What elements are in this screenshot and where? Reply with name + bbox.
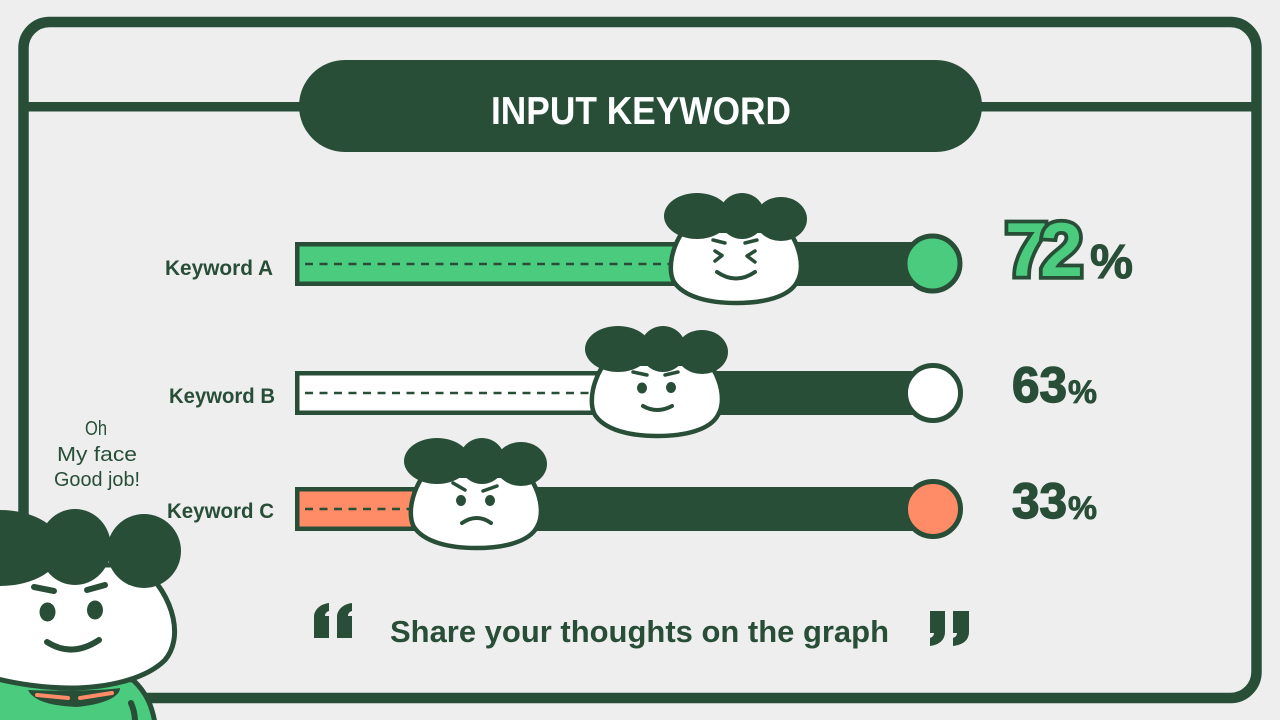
speech text (54, 418, 140, 491)
value: 63%: 63 (1012, 357, 1067, 413)
row: Keyword B (169, 326, 1097, 436)
face features (34, 585, 105, 650)
value: 72%: 7 (1005, 208, 1048, 293)
icon: opening quote mark (314, 603, 352, 638)
arm line (131, 703, 135, 720)
icon: laughing face (664, 193, 807, 303)
icon: closing quote mark (930, 611, 969, 646)
head (0, 565, 175, 688)
icon: smiling face (585, 326, 728, 436)
character: large mascot (0, 509, 181, 720)
bar: Keyword C (295, 482, 960, 536)
value: 63% (1012, 357, 1097, 413)
bar: Keyword A (295, 236, 960, 291)
quote block (314, 603, 969, 649)
value: 72% (1005, 208, 1133, 293)
icon: frowning face (404, 438, 547, 548)
bar: Keyword B (295, 366, 960, 420)
row: Keyword C (167, 438, 1097, 548)
label: Keyword A: Keyword A (165, 257, 273, 280)
body (0, 665, 156, 720)
speech text: My face (57, 444, 137, 466)
hair (0, 509, 181, 588)
collar trim (37, 693, 112, 698)
speech text: Oh (85, 418, 107, 440)
row: Keyword A (165, 193, 1133, 303)
value: 33%: 33 (1012, 473, 1067, 529)
value: 72%: % (1090, 236, 1133, 289)
text: prompt: Share your thoughts on the graph (390, 614, 889, 649)
title (299, 60, 982, 152)
label: Keyword B: Keyword B (169, 385, 275, 408)
value: 72%: 2 (1040, 208, 1083, 293)
value: 33% (1012, 473, 1097, 529)
title: INPUT KEYWORD (491, 90, 791, 133)
label: Keyword C: Keyword C (167, 500, 274, 523)
collar (28, 688, 120, 707)
value: 63%: % (1068, 374, 1097, 410)
value: 33%: % (1068, 490, 1097, 526)
speech text: Good job! (54, 469, 140, 491)
